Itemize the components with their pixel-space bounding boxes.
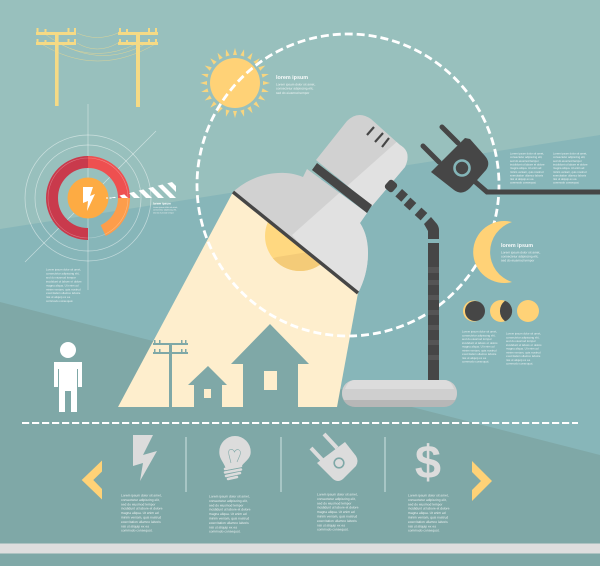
text: phases notes column 2: commodo consequat. xyxy=(506,362,533,366)
text: bottom column 3: Lorem ipsum dolor sit amet, xyxy=(317,492,358,496)
text: phases notes column 2: Lorem ipsum dolor sit amet, xyxy=(506,332,541,336)
bottom bar xyxy=(0,544,600,554)
text: moon label xyxy=(501,243,540,263)
text: plug notes column 1: magna aliqua. Ut enim ad xyxy=(510,167,542,170)
text: phases notes column 1: Lorem ipsum dolor sit amet, xyxy=(462,330,497,334)
lamp shade and head xyxy=(233,115,408,293)
text: bottom column 4: commodo consequat. xyxy=(408,529,440,533)
text: bottom column 2: consectetur adipiscing elit, xyxy=(209,499,248,503)
text: left gauge notes: sed do eiusmod tempor xyxy=(46,275,76,279)
text: plug notes column 2: nisi ut aliquip ex ea xyxy=(553,178,577,181)
text: phases notes column 1: consectetur adipiscing elit, xyxy=(462,333,496,337)
text: plug notes column 2: minim veniam, quis nostrud xyxy=(553,171,587,174)
lamp base xyxy=(342,380,457,407)
hatched pointer xyxy=(106,182,176,198)
text: left gauge notes: commodo consequat. xyxy=(46,299,73,303)
icon: large house xyxy=(231,324,309,407)
text: sun label: lorem ipsum xyxy=(276,75,308,81)
dashed orbit circle xyxy=(197,34,499,336)
text: bottom column 4: exercitation ullamco laboris xyxy=(408,520,448,524)
text: phases notes column 2: exercitation ullamco laboris xyxy=(506,354,541,358)
gauge ring light red xyxy=(88,162,124,198)
arrow: right chevron xyxy=(472,461,492,501)
text: plug notes column 2: exercitation ullamco laboris xyxy=(553,174,587,177)
text: phases notes column 2: nisi ut aliquip ex ea xyxy=(506,358,531,362)
text: phases notes column 1: sed do eiusmod tempor xyxy=(462,337,492,341)
text: plug notes column 1: Lorem ipsum dolor sit amet, xyxy=(510,152,544,156)
text: sun label: sed do eiusmod tempor xyxy=(276,91,310,95)
text: bottom column 2: minim veniam, quis nostrud xyxy=(209,516,249,520)
text: phases notes column 1: magna aliqua. Ut enim ad xyxy=(462,344,495,348)
text: left gauge notes: nisi ut aliquip ex ea xyxy=(46,295,71,299)
text: left gauge notes: Lorem ipsum dolor sit amet, xyxy=(46,268,81,272)
text: bottom column 1: minim veniam, quis nostrud xyxy=(121,516,161,520)
text: bottom column 2: commodo consequat. xyxy=(209,530,241,534)
separator xyxy=(280,437,282,492)
text: bottom column 3: magna aliqua. Ut enim ad xyxy=(317,510,355,514)
text: bottom column 2: magna aliqua. Ut enim ad xyxy=(209,512,247,516)
text: bottom column 1: Lorem ipsum dolor sit amet, xyxy=(121,494,162,498)
text: moon label: sed do eiusmod tempor xyxy=(501,259,535,263)
text: phases notes column 1: exercitation ullamco laboris xyxy=(462,352,497,356)
gauge ring dark red xyxy=(52,162,88,234)
text: bottom column 3: sed do eiusmod tempor xyxy=(317,501,352,505)
separator xyxy=(185,437,187,492)
gauge label: sed do eiusmod tempor xyxy=(153,211,174,214)
text: bottom column 3: exercitation ullamco laboris xyxy=(317,519,357,523)
target gauge xyxy=(25,104,188,290)
phase: new moon xyxy=(463,300,485,322)
plug prongs xyxy=(423,127,458,162)
text: phases notes column 2: minim veniam, quis nostrud xyxy=(506,350,541,354)
text: plug notes column 2: magna aliqua. Ut enim ad xyxy=(553,167,585,170)
text: bottom column 1: exercitation ullamco laboris xyxy=(121,520,161,524)
text: phases notes column 2: magna aliqua. Ut enim ad xyxy=(506,346,539,350)
gauge label xyxy=(153,202,178,214)
text: phases notes column 2: sed do eiusmod tempor xyxy=(506,339,536,343)
gauge label: lorem ipsum xyxy=(153,202,171,206)
text: phases notes column 1: nisi ut aliquip ex ea xyxy=(462,356,487,360)
dashed divider xyxy=(22,422,578,424)
text: bottom column 1: consectetur adipiscing elit, xyxy=(121,498,160,502)
separator xyxy=(384,437,386,492)
text: phases notes column 1: minim veniam, quis nostrud xyxy=(462,348,497,352)
text: plug notes column 2: sed do eiusmod tempor xyxy=(553,160,582,163)
text: bottom column 4: magna aliqua. Ut enim ad xyxy=(408,511,446,515)
moon phases xyxy=(463,300,539,322)
text: plug notes column 1: commodo consequat. xyxy=(510,182,537,185)
icon: lightning bolt xyxy=(133,435,157,481)
text: phases notes column 2: incididunt ut labore et dolore xyxy=(506,343,542,347)
text: bottom column 1: nisi ut aliquip ex ea xyxy=(121,524,149,528)
text: plug notes column 2: Lorem ipsum dolor sit amet, xyxy=(553,152,587,156)
text: bottom column 3: minim veniam, quis nostrud xyxy=(317,514,357,518)
lamp bulb xyxy=(265,222,320,271)
text: sun label xyxy=(276,75,315,95)
power plug xyxy=(423,127,600,193)
plug socket ring xyxy=(454,160,470,176)
gauge label: Lorem ipsum dolor sit amet, xyxy=(153,207,178,209)
text: left gauge notes: incididunt ut labore et dolore xyxy=(46,279,82,283)
text: phases notes column 1: incididunt ut labore et dolore xyxy=(462,341,498,345)
icon: small house xyxy=(188,366,227,407)
text: bottom column 3: incididunt ut labore et dolore xyxy=(317,506,359,510)
text: bottom column 3: commodo consequat. xyxy=(317,528,349,532)
plug cable xyxy=(472,179,600,192)
lamp vents xyxy=(367,127,389,147)
text: bottom column 4: Lorem ipsum dolor sit amet, xyxy=(408,494,449,498)
text: bottom column 4: sed do eiusmod tempor xyxy=(408,502,443,506)
text: phases notes column 2: consectetur adipiscing elit, xyxy=(506,335,540,339)
icon: light bulb xyxy=(219,436,251,479)
text: bottom column 1: commodo consequat. xyxy=(121,529,153,533)
text: bottom column 4: consectetur adipiscing elit, xyxy=(408,498,447,502)
text: bottom column 2: exercitation ullamco laboris xyxy=(209,521,249,525)
text: plug notes column 1: exercitation ullamco laboris xyxy=(510,174,544,177)
text: moon label: lorem ipsum xyxy=(501,243,533,249)
icon: power poles xyxy=(36,28,158,107)
icon: sun xyxy=(200,48,270,118)
icon: dollar sign: $ xyxy=(415,435,441,488)
text: bottom column 1: sed do eiusmod tempor xyxy=(121,502,156,506)
icon: crescent moon xyxy=(473,221,512,283)
icon: person xyxy=(54,342,82,412)
text: plug notes column 2: consectetur adipiscing elit, xyxy=(553,156,585,159)
plug body xyxy=(431,138,488,193)
gauge ring orange xyxy=(103,198,124,231)
text: bottom column 4: minim veniam, quis nostrud xyxy=(408,516,448,520)
icon: small utility pole in beam xyxy=(153,340,188,407)
text: left gauge notes: minim veniam, quis nostrud xyxy=(46,287,81,291)
text: bottom column 3: nisi ut aliquip ex ea xyxy=(317,523,345,527)
text: plug notes column 1: consectetur adipiscing elit, xyxy=(510,156,542,159)
text: bottom column 1: magna aliqua. Ut enim ad xyxy=(121,511,159,515)
text: plug notes column 1: nisi ut aliquip ex ea xyxy=(510,178,534,181)
light beam xyxy=(118,192,358,407)
icon: lightning in gauge xyxy=(83,187,95,211)
text: plug notes column 1: incididunt ut labore et dolore xyxy=(510,163,545,166)
text: plug notes column 1: minim veniam, quis nostrud xyxy=(510,171,544,174)
text: plug notes column 1: sed do eiusmod tempor xyxy=(510,160,539,163)
text: bottom column 2: nisi ut aliquip ex ea xyxy=(209,525,237,529)
desk lamp xyxy=(233,115,457,407)
text: plug notes column 2: incididunt ut labore et dolore xyxy=(553,163,588,166)
text: phases notes column 1: commodo consequat. xyxy=(462,360,489,364)
lamp pole bands xyxy=(428,267,439,360)
text: bottom column 1: incididunt ut labore et dolore xyxy=(121,507,163,511)
text: left gauge notes: consectetur adipiscing elit, xyxy=(46,271,80,275)
text: sun label: consectetur adipiscing elit, xyxy=(276,87,313,91)
text: bottom column 2: sed do eiusmod tempor xyxy=(209,503,244,507)
gauge centre disc xyxy=(68,178,108,218)
text: moon label: Lorem ipsum dolor sit amet, xyxy=(501,250,540,254)
lamp arm xyxy=(384,179,439,380)
text: bottom column 2: incididunt ut labore et dolore xyxy=(209,508,251,512)
text: left gauge notes: exercitation ullamco laboris xyxy=(46,291,81,295)
gauge label: consectetur adipiscing elit, xyxy=(153,209,177,212)
icon: plug xyxy=(311,434,358,481)
text: bottom column 2: Lorem ipsum dolor sit amet, xyxy=(209,494,250,498)
text: bottom column 4: incididunt ut labore et dolore xyxy=(408,507,450,511)
text: sun label: Lorem ipsum dolor sit amet, xyxy=(276,82,315,86)
text: plug notes column 2: commodo consequat. xyxy=(553,182,580,185)
arrow: left chevron xyxy=(82,460,102,500)
text: bottom column 4: nisi ut aliquip ex ea xyxy=(408,524,436,528)
text: left gauge notes: magna aliqua. Ut enim ad xyxy=(46,283,79,287)
text: bottom column 3: consectetur adipiscing elit, xyxy=(317,497,356,501)
lamp shade rim xyxy=(233,192,358,293)
lamp collar band xyxy=(312,163,372,213)
phase: full moon xyxy=(517,300,539,322)
phase: half moon xyxy=(490,300,512,322)
text: moon label: consectetur adipiscing elit, xyxy=(501,255,538,259)
